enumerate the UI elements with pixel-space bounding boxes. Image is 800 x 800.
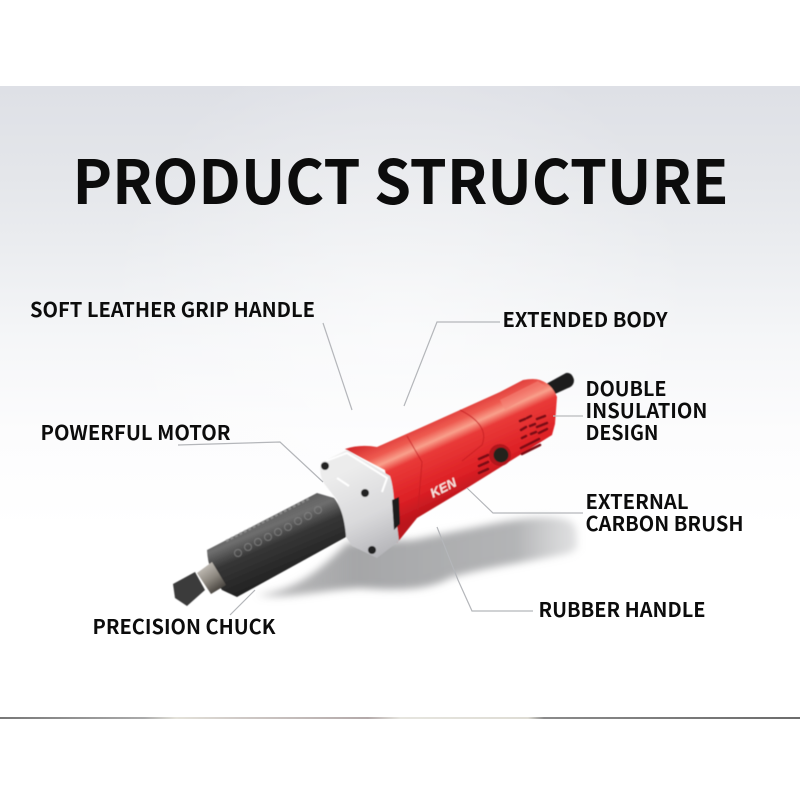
product: straight grinder [173,373,574,606]
leader: double insulation design [553,415,583,417]
label: external carbon brush [586,486,744,537]
title: PRODUCT STRUCTURE [72,133,728,222]
leader: precision chuck [230,590,255,615]
KEN logo: KEN [428,475,459,501]
chuck nut [173,572,205,606]
leader: external carbon brush [467,488,583,513]
housing front face edge [326,453,387,492]
label: rubber handle: RUBBER HANDLE [538,594,706,623]
label: external carbon brush: EXTERNAL [586,486,688,515]
housing screws [321,462,376,554]
grip dimples [234,506,322,556]
background glow [0,86,800,718]
chuck collar [197,562,226,594]
side switch slot [392,497,400,530]
label: double insulation design: DOUBLE [586,373,666,402]
silver gear housing [320,450,399,558]
leader: powerful motor [178,442,323,482]
leader: extended body [404,322,500,406]
label: double insulation design: DESIGN [586,417,658,446]
red motor body [345,379,557,543]
floor line [0,717,800,719]
label: powerful motor: POWERFUL MOTOR [40,417,231,446]
tool shadow [257,517,578,596]
label: external carbon brush: CARBON BRUSH [586,508,744,537]
slide switch [489,444,511,466]
label: double insulation design: INSULATION [586,395,708,424]
grip top ribs [226,498,310,541]
rubber grip [207,493,346,597]
label: extended body: EXTENDED BODY [502,304,668,333]
leader: rubber handle [437,527,533,611]
label: precision chuck: PRECISION CHUCK [92,611,276,640]
body seam [407,410,484,510]
power cord stub [546,373,574,394]
body rear highlight [500,381,545,410]
leader: soft leather grip handle [323,323,352,410]
label: double insulation design [586,373,708,446]
label: soft leather grip handle: SOFT LEATHER GRIP HANDLE [30,294,315,323]
background panel [0,86,800,718]
ventilation slots [479,416,547,473]
